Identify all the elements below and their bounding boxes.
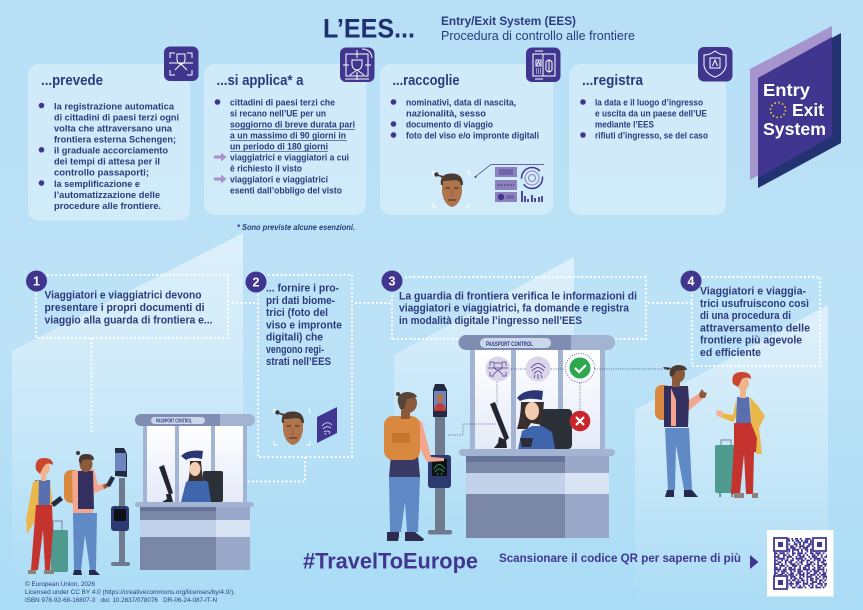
step 1: presentare i propri documenti di bbox=[44, 302, 204, 314]
step 3 bbox=[382, 270, 637, 327]
panel: registra bbox=[569, 64, 726, 215]
subtitle: Entry/Exit System (EES) bbox=[441, 14, 576, 28]
illustration: passport booth 2: PASSPORT CONTROL bbox=[486, 341, 533, 348]
illustration: woman talking bbox=[715, 372, 765, 498]
list: registra: la data e il luogo d’ingresso bbox=[595, 98, 703, 108]
list: si applica: un periodo di 180 giorni bbox=[230, 142, 328, 152]
step 2: viso e impronte bbox=[266, 319, 342, 331]
panel: prevede bbox=[28, 64, 190, 220]
QR call to action: Scansionare il codice QR per saperne di più bbox=[499, 551, 741, 565]
panel: raccoglie bbox=[380, 64, 554, 215]
credits: © European Union, 2026 bbox=[25, 580, 95, 588]
credits: Licensed under CC BY 4.0 (https://creativecommons.org/licenses/by/4.0/). bbox=[25, 589, 235, 596]
credits: ISBN 978-92-68-16807-3 doi: 10.2837/078076 DR-06-24-087-IT-N bbox=[25, 597, 217, 604]
heading: registra: ...registra bbox=[582, 73, 644, 89]
list: prevede: la registrazione automatica bbox=[54, 101, 175, 112]
illustration: man with passport 1 bbox=[64, 451, 115, 575]
dotted connectors bbox=[36, 275, 820, 482]
list: si applica: si recano nell’UE per un bbox=[230, 108, 326, 120]
heading: prevede: ...prevede bbox=[41, 73, 103, 89]
list: raccoglie: nazionalità, sesso bbox=[406, 108, 486, 120]
arrow bbox=[750, 555, 758, 569]
list: prevede bbox=[39, 101, 179, 212]
list: prevede: procedure alle frontiere. bbox=[54, 201, 161, 212]
list: si applica: esenti dall’obbligo del visto bbox=[230, 186, 342, 196]
background building shapes bbox=[12, 233, 828, 610]
step 2: ... fornire i pro- bbox=[266, 282, 339, 294]
step 3: 3 bbox=[389, 274, 396, 288]
list: prevede: l’automatizzazione delle bbox=[54, 190, 160, 201]
step 1: Viaggiatori e viaggiatrici devono bbox=[44, 290, 202, 302]
credits bbox=[25, 580, 235, 604]
list: raccoglie: documento di viaggio bbox=[406, 120, 493, 130]
list: prevede: controllo passaporti; bbox=[54, 168, 149, 179]
thin dotted links bbox=[448, 369, 665, 435]
list: prevede: dei tempi di attesa per il bbox=[54, 157, 160, 168]
heading: si applica: ...si applica* a bbox=[216, 73, 304, 89]
QR code bbox=[767, 530, 834, 596]
step 2 bbox=[246, 272, 342, 368]
step 4: di una procedura di bbox=[700, 310, 791, 322]
illustration: passport booth 2 bbox=[458, 335, 615, 538]
list: prevede: di cittadini di paesi terzi ogni bbox=[54, 112, 179, 123]
step 4: ed efficiente bbox=[700, 347, 761, 359]
list: si applica: è richiesto il visto bbox=[230, 164, 302, 174]
list: si applica: soggiorno di breve durata pari bbox=[230, 120, 355, 130]
list: registra: e uscita da un paese dell’UE bbox=[595, 108, 707, 120]
icon: fingerprint check circle bbox=[526, 356, 550, 382]
step 1 bbox=[26, 270, 212, 326]
title: L’EES... bbox=[323, 14, 415, 44]
step 4: frontiere più agevole bbox=[700, 335, 802, 347]
step 3: viaggiatori e viaggiatrici, fa domande e registra bbox=[399, 303, 630, 315]
step 1: 1 bbox=[33, 274, 40, 288]
step 2: strati nell’EES bbox=[266, 356, 331, 368]
subtitle bbox=[441, 14, 635, 43]
step 2: 2 bbox=[253, 276, 260, 290]
logo: Entry Exit System: System bbox=[763, 119, 826, 139]
icon: face with data bbox=[433, 164, 544, 207]
step 2: pri dati biome- bbox=[266, 295, 335, 307]
step 3: in modalità digitale l’ingresso nell’EES bbox=[399, 315, 582, 327]
list: raccoglie: foto del viso e/o impronte digitali bbox=[406, 130, 539, 142]
icon: biometric face and fingerprint panel bbox=[274, 407, 337, 445]
icon: green check bbox=[566, 354, 594, 382]
icon: shield bbox=[698, 47, 732, 82]
list: prevede: la semplificazione e bbox=[54, 179, 140, 190]
icon: face scan bbox=[164, 46, 198, 81]
list: si applica bbox=[214, 98, 355, 196]
step 2: digitali) che bbox=[266, 332, 323, 344]
list: registra: mediante l’EES bbox=[595, 120, 654, 130]
hashtag: #TravelToEurope bbox=[303, 548, 478, 574]
list: prevede: il graduale accorciamento bbox=[54, 146, 168, 157]
logo: Entry Exit System: Exit bbox=[792, 100, 824, 120]
illustration: kiosk 2 bbox=[428, 384, 452, 534]
icon: document and fingerprint bbox=[526, 48, 560, 82]
step 3: La guardia di frontiera verifica le informazioni di bbox=[399, 290, 637, 302]
list: si applica: viaggiatori e viaggiatrici bbox=[230, 174, 328, 186]
list: raccoglie: nominativi, data di nascita, bbox=[406, 98, 516, 108]
logo: Entry Exit System: Entry bbox=[763, 80, 810, 100]
list: prevede: frontiera esterna Schengen; bbox=[54, 135, 176, 146]
illustration: passport booth 1: PASSPORT CONTROL bbox=[156, 419, 192, 425]
icon: scan frame bbox=[340, 48, 374, 82]
list: si applica: viaggiatrici e viaggiatori a cui bbox=[230, 152, 349, 164]
illustration: man from behind bbox=[384, 392, 444, 541]
step 4: attraversamento delle bbox=[700, 322, 810, 334]
list: si applica: a un massimo di 90 giorni in bbox=[230, 130, 346, 142]
list: registra bbox=[580, 98, 708, 142]
step 4: trici usufruiscono così bbox=[700, 298, 809, 310]
panel: si applica bbox=[204, 64, 366, 215]
step 4: 4 bbox=[688, 274, 695, 288]
step 2: trici (foto del bbox=[266, 307, 328, 319]
list: registra: rifiuti d’ingresso, se del caso bbox=[595, 130, 708, 142]
icon: face check circle bbox=[486, 356, 510, 382]
footnote: * Sono previste alcune esenzioni. bbox=[237, 222, 355, 232]
step 2: vengono regi- bbox=[266, 344, 324, 356]
step 4 bbox=[680, 270, 810, 359]
heading: raccoglie: ...raccoglie bbox=[392, 73, 460, 89]
step 1: viaggio alla guarda di frontiera e... bbox=[44, 314, 212, 326]
logo: Entry Exit System bbox=[750, 26, 841, 188]
illustration: man talking bbox=[655, 365, 707, 497]
illustration: passport booth 1 bbox=[135, 414, 255, 570]
list: prevede: volta che attraversano una bbox=[54, 124, 173, 134]
illustration: woman with suitcase 1 bbox=[26, 458, 68, 574]
list: si applica: cittadini di paesi terzi che bbox=[230, 98, 335, 108]
list: raccoglie bbox=[391, 98, 539, 142]
step 4: Viaggiatori e viaggia- bbox=[700, 286, 806, 298]
icon: red cross bbox=[570, 411, 590, 431]
subtitle: Procedura di controllo alle frontiere bbox=[441, 29, 635, 43]
illustration: kiosk 1 bbox=[111, 448, 130, 566]
